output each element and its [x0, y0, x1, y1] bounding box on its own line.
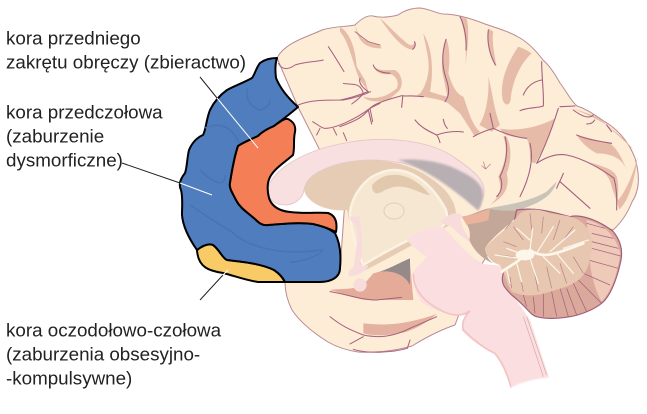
diencephalon [304, 160, 456, 272]
label: prefrontal cortex: (zaburzenie [6, 126, 104, 146]
label: orbitofrontal cortex: (zaburzenia obsesyjno- [6, 344, 200, 364]
region: orbitofrontal cortex [197, 244, 285, 282]
leader: prefrontal [122, 163, 212, 195]
label: anterior cingulate cortex: zakrętu obręczy (zbieractwo) [6, 52, 246, 72]
label: anterior cingulate cortex: kora przedniego [6, 28, 141, 48]
folds: front lobe [278, 47, 380, 141]
region: prefrontal cortex [180, 58, 340, 282]
temporal lobe folds [330, 213, 477, 352]
dark gap behind brainstem [462, 182, 557, 263]
corpus callosum [268, 139, 484, 210]
label: orbitofrontal cortex: -kompulsywne) [6, 368, 132, 388]
label: prefrontal cortex: dysmorficzne) [6, 150, 123, 170]
cerebrum base [277, 8, 638, 352]
leader: anterior cingulate [200, 77, 258, 148]
label: orbitofrontal cortex: kora oczodołowo-czołowa [6, 320, 221, 340]
region: anterior cingulate cortex [230, 119, 337, 232]
label: prefrontal cortex: kora przedczołowa [6, 102, 163, 122]
brainstem [407, 227, 560, 403]
leader: orbitofrontal [200, 270, 228, 300]
cerebellum [485, 209, 622, 318]
folds: upper and rear lobes [340, 17, 638, 210]
